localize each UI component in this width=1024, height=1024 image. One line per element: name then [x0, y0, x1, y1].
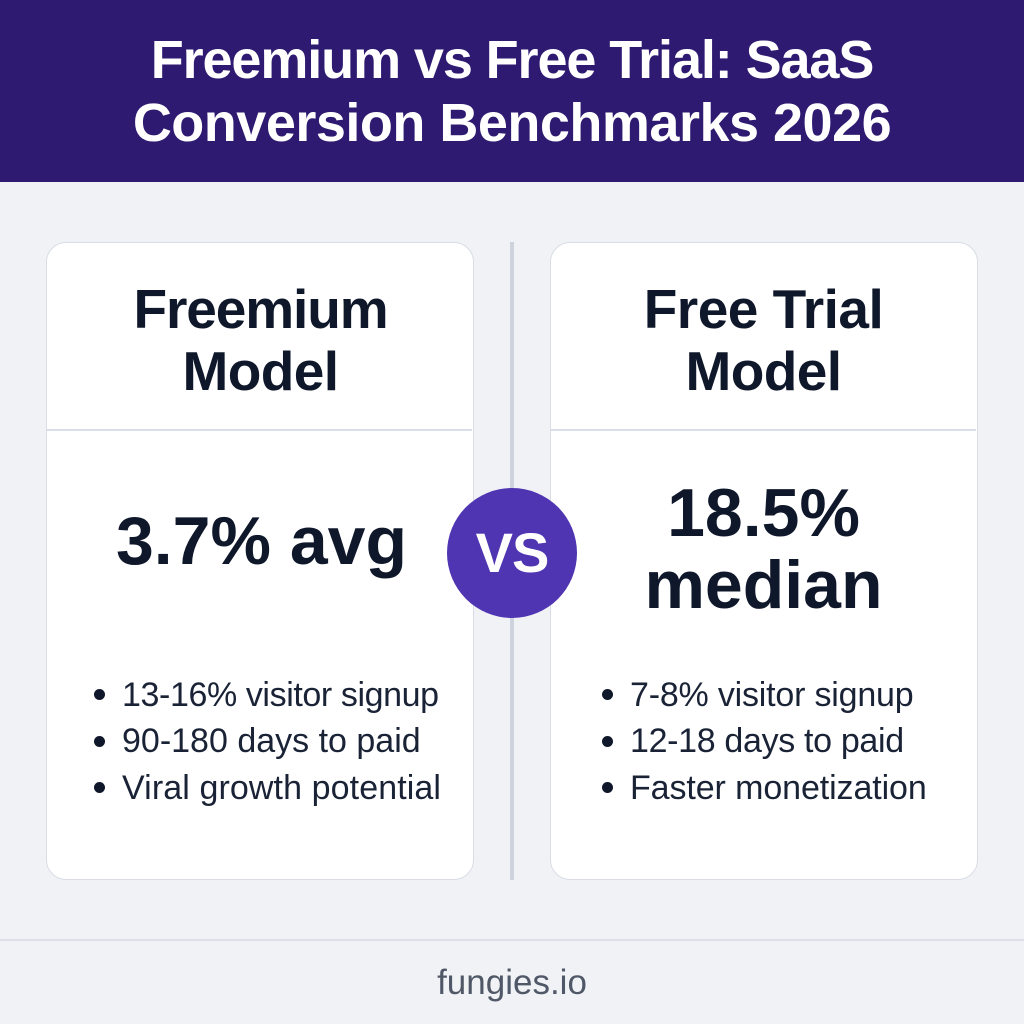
bullet list: freemium	[94, 676, 441, 807]
bullet list: free trial	[602, 676, 927, 807]
heading: freemium model: Model	[183, 340, 338, 402]
bullet list: free trial: 7-8% visitor signup	[630, 676, 913, 714]
header banner	[0, 0, 1024, 182]
stat: free trial median	[644, 475, 883, 623]
title: Conversion Benchmarks 2026	[133, 93, 891, 153]
panel: freemium	[46, 242, 474, 880]
panel: free trial	[550, 242, 978, 880]
center divider	[510, 242, 514, 880]
bullet list: freemium: 13-16% visitor signup	[122, 676, 439, 714]
heading: freemium model	[133, 278, 388, 402]
heading: freemium model: Freemium	[133, 278, 388, 340]
heading: free trial model	[644, 278, 883, 402]
title	[133, 30, 891, 153]
stat: free trial median: median	[644, 547, 883, 623]
bullet list: free trial: Faster monetization	[630, 769, 927, 807]
bullet list: freemium: Viral growth potential	[122, 769, 441, 807]
bullet list: free trial: 12-18 days to paid	[630, 722, 904, 760]
vs badge: VS	[476, 521, 548, 584]
footer	[0, 939, 1024, 1024]
footer brand: fungies.io	[437, 963, 587, 1002]
stat: freemium average: 3.7% avg	[116, 503, 407, 579]
bullet list: freemium: 90-180 days to paid	[122, 722, 421, 760]
heading: free trial model: Model	[686, 340, 841, 402]
heading: free trial model: Free Trial	[644, 278, 883, 340]
vs badge	[447, 488, 577, 618]
title: Freemium vs Free Trial: SaaS	[151, 30, 873, 90]
stat: free trial median: 18.5%	[667, 475, 860, 551]
